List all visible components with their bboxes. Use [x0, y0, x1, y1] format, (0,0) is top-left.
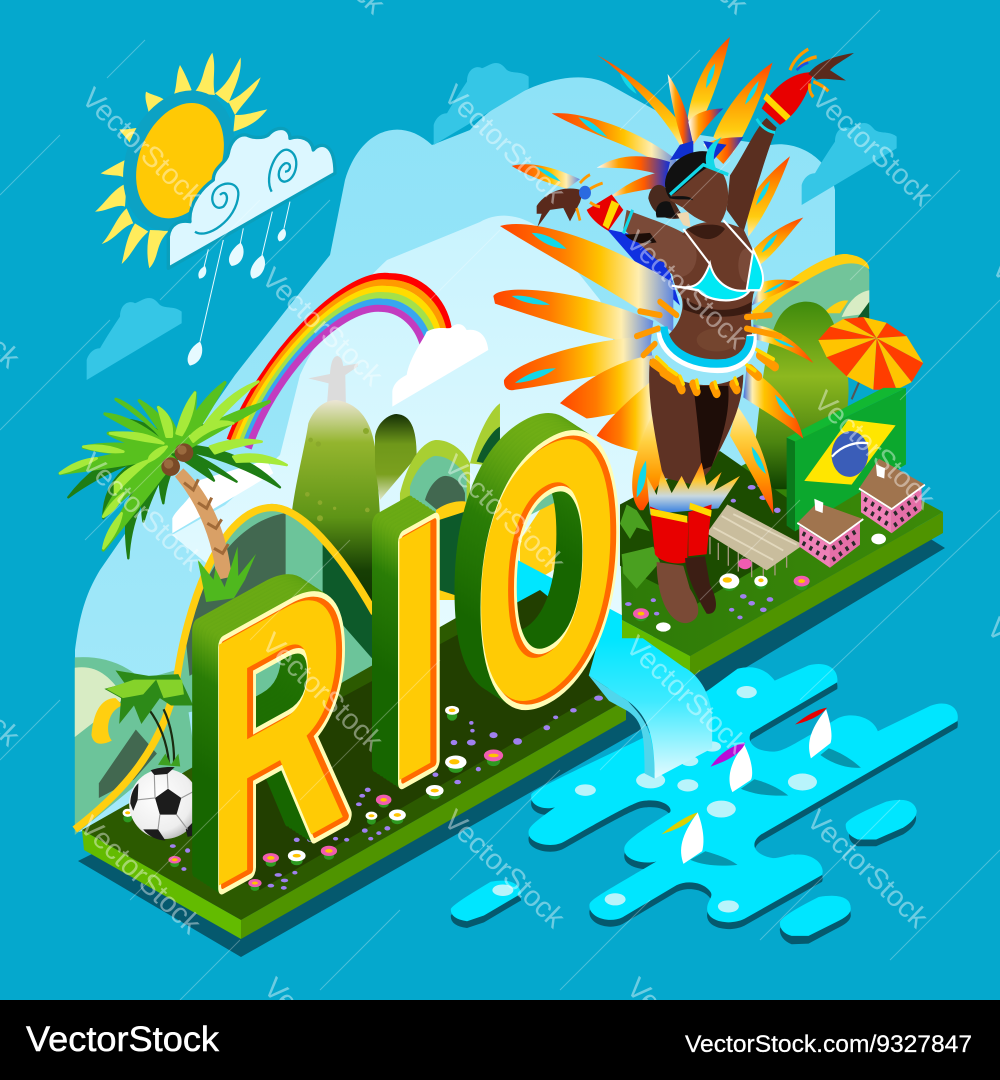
title: RIO letter I: I — [389, 439, 449, 863]
title: RIO letter I — [363, 422, 449, 863]
title: RIO letter I: I — [382, 435, 442, 859]
small palms — [104, 670, 193, 767]
watermark text: VectorStock — [619, 630, 753, 761]
watermark text: VectorStock — [437, 79, 571, 210]
head — [665, 137, 728, 224]
title: RIO letter I: I — [379, 432, 439, 857]
watermark text: VectorStock — [807, 385, 941, 516]
thatched hut — [707, 505, 803, 581]
feather skirt — [637, 302, 780, 394]
watermark text: VectorStock — [800, 804, 934, 935]
title: RIO letter R: R — [210, 499, 351, 968]
icon: soccer ball — [129, 767, 199, 841]
watermark text: VectorStock — [255, 627, 389, 758]
title: RIO letter R: R — [194, 488, 335, 957]
icon: rain cloud — [168, 128, 335, 366]
title: RIO letter O: O — [478, 335, 622, 806]
bikini — [672, 220, 763, 300]
title: RIO letter R: R — [206, 499, 347, 968]
footer image id: VectorStock.com/9327847 — [685, 1031, 972, 1058]
pink houses — [797, 459, 925, 568]
title: RIO letter O: O — [468, 329, 612, 799]
hill gap between letters — [436, 450, 580, 600]
watermark text: VectorStock — [73, 810, 207, 941]
flowers on left platform — [123, 696, 603, 891]
samba dancer — [493, 37, 854, 623]
title: RIO letter O: O — [458, 322, 603, 793]
pointing arm — [537, 175, 685, 262]
right platform — [620, 435, 943, 677]
title: RIO letter R: R — [197, 490, 338, 959]
title: RIO letter I: I — [386, 437, 446, 861]
watermark text: VectorStock — [805, 82, 939, 213]
shadow under platforms — [78, 520, 945, 957]
title: RIO letter I: I — [389, 439, 449, 863]
watermark text: VectorStock — [619, 225, 753, 356]
title: RIO letter I: I — [363, 422, 423, 846]
watermark text: VectorStock — [437, 449, 571, 580]
title: RIO letter I: I — [385, 439, 445, 863]
sky cloud backdrop — [75, 77, 835, 833]
title: RIO letter O: O — [474, 335, 618, 806]
title: RIO letter I: I — [370, 426, 429, 850]
title: RIO letter O: O — [461, 324, 606, 795]
footer bar — [0, 1000, 1000, 1080]
raised arm — [727, 49, 854, 233]
Brazil flag block — [787, 388, 906, 531]
title: RIO letter R: R — [207, 496, 348, 966]
pool of water — [451, 664, 958, 944]
title: RIO letter I: I — [376, 430, 436, 855]
title: RIO letter R: R — [204, 494, 344, 964]
title: RIO letter I: I — [366, 424, 426, 848]
title: RIO letter O: O — [464, 327, 609, 797]
legs feather cuffs and red boots — [647, 462, 740, 623]
title: RIO letter R: R — [210, 499, 351, 968]
title: RIO letter I: I — [373, 428, 433, 853]
palm tree — [60, 382, 287, 580]
title: RIO letter R: R — [187, 484, 328, 953]
title: RIO letter O: O — [474, 333, 619, 803]
title: RIO letter O: O — [471, 331, 616, 801]
title: RIO letter R: R — [190, 486, 331, 955]
watermark text: VectorStock — [437, 804, 571, 935]
watermark text: VectorStock — [255, 262, 389, 393]
right hills and umbrella — [620, 254, 925, 632]
hills behind left — [75, 504, 374, 835]
watermark text: VectorStock — [75, 82, 209, 213]
grass tuft — [198, 546, 256, 602]
title: RIO letter O: O — [455, 320, 599, 791]
left platform — [82, 610, 626, 939]
waterfall — [589, 638, 712, 779]
feathers — [493, 37, 813, 514]
rainbow — [230, 276, 448, 448]
title: RIO letter R: R — [184, 482, 325, 951]
river between platforms — [470, 535, 670, 705]
icon: sun — [95, 53, 267, 268]
title: RIO letter O: O — [478, 335, 622, 806]
title: RIO letter R: R — [200, 492, 341, 961]
icon: sailboats — [661, 708, 861, 866]
body — [648, 185, 758, 485]
icon: beach umbrella — [818, 317, 923, 390]
watermark text: VectorStock — [75, 447, 209, 578]
right platform flowers — [625, 483, 886, 632]
mountains and Christ statue — [172, 276, 500, 613]
small plants — [620, 505, 660, 589]
footer logo: VectorStock — [26, 1020, 220, 1059]
far clouds — [87, 63, 897, 380]
dark letter shadows on ground — [195, 590, 640, 890]
title: RIO letter O: O — [452, 318, 596, 789]
